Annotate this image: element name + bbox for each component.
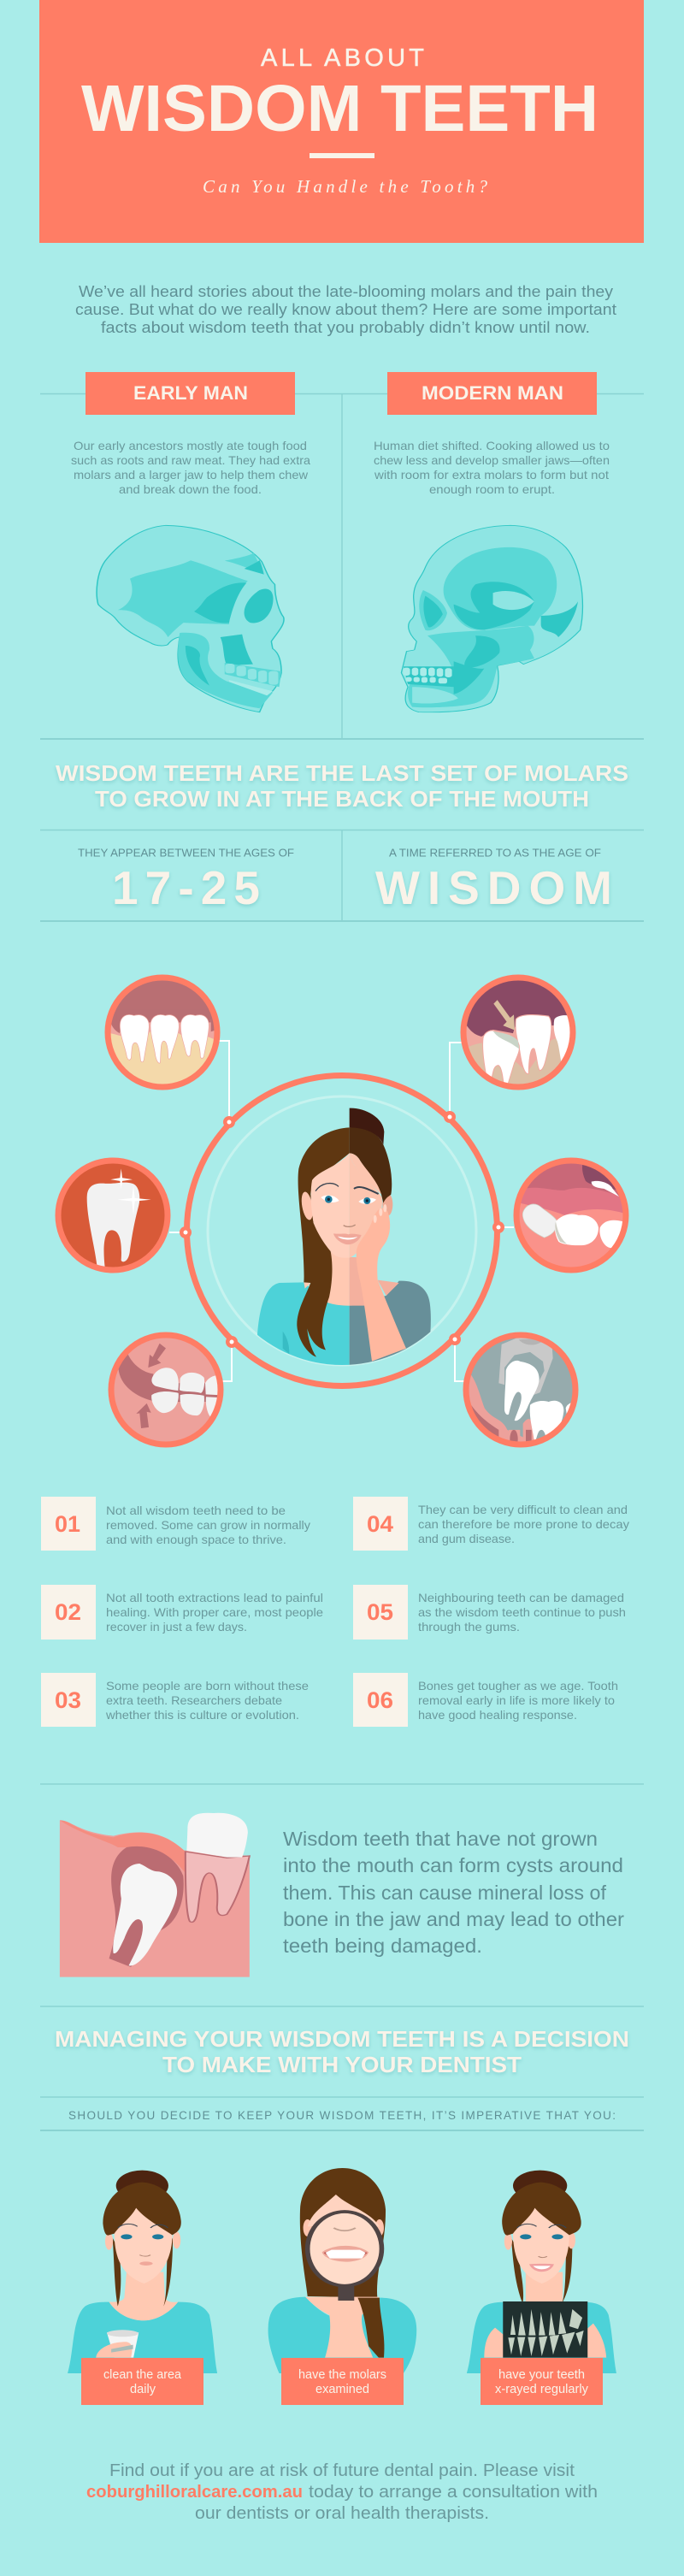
- modern man label: [387, 372, 597, 415]
- heading: managing your wisdom teeth: MANAGING YOUR WISDOM TEETH IS A DECISION: [55, 2026, 629, 2052]
- fact 05: through the gums.: [418, 1620, 520, 1634]
- cyst paragraph: teeth being damaged.: [283, 1935, 482, 1957]
- label: clean the area daily: daily: [130, 2382, 156, 2396]
- fact 03: whether this is culture or evolution.: [105, 1708, 299, 1722]
- fact 06: [353, 1673, 618, 1727]
- label: have the molars examined: have the molars: [298, 2367, 386, 2382]
- fact 04: and gum disease.: [418, 1532, 515, 1545]
- fact 02: healing. With proper care, most people: [106, 1605, 323, 1619]
- heading: wisdom teeth are the last molars: [56, 760, 628, 812]
- cyst paragraph: them. This can cause mineral loss of: [283, 1882, 607, 1904]
- modern man text: enough room to erupt.: [429, 482, 555, 496]
- label: have your teeth x-rayed regularly: x-rayed regularly: [495, 2382, 588, 2396]
- title: all about: ALL ABOUT: [261, 44, 424, 72]
- fact 05: as the wisdom teeth continue to push: [418, 1605, 626, 1619]
- label: have your teeth x-rayed regularly: [481, 2358, 603, 2405]
- fact 02: recover in just a few days.: [106, 1620, 247, 1634]
- illustration: woman with magnifying mirror: [268, 2168, 416, 2373]
- icon: early man skull: [97, 525, 284, 712]
- early man text: molars and a larger jaw to help them chew: [74, 468, 309, 482]
- label: clean the area daily: clean the area: [103, 2367, 182, 2382]
- fact 03: 03: [55, 1687, 81, 1713]
- icon: impacted tooth circle: [513, 1156, 630, 1274]
- cyst paragraph: into the mouth can form cysts around: [283, 1854, 623, 1876]
- fact 05: 05: [367, 1599, 393, 1625]
- illustration: woman with cup: [68, 2171, 217, 2373]
- fact 01: removed. Some can grow in normally: [106, 1518, 310, 1532]
- stat: wisdom: [375, 847, 612, 914]
- fact 02: 02: [55, 1599, 81, 1625]
- fact 05: Neighbouring teeth can be damaged: [418, 1591, 624, 1604]
- fact 02: Not all tooth extractions lead to painful: [106, 1591, 323, 1604]
- label: have your teeth x-rayed regularly: have your teeth: [498, 2367, 585, 2382]
- fact 04: 04: [367, 1511, 393, 1537]
- modern man text: [374, 439, 610, 496]
- stat: ages: [78, 847, 294, 914]
- fact 03: [41, 1673, 309, 1727]
- icon: modern man skull: [401, 525, 582, 712]
- panel: header banner: [39, 0, 644, 243]
- word: wisdom: WISDOM: [375, 861, 612, 914]
- modern man text: chew less and develop smaller jaws—often: [374, 453, 610, 467]
- icon: healthy teeth circle: [103, 972, 222, 1090]
- intro paragraph: We’ve all heard stories about the late-blooming molars and the pain they: [79, 282, 614, 300]
- icon: extraction circle: [462, 1332, 581, 1450]
- early man text: [71, 439, 310, 496]
- illustration: woman with toothache: [257, 1108, 431, 1385]
- intro paragraph: [75, 282, 616, 336]
- intro paragraph: facts about wisdom teeth that you probably didn’t know until now.: [101, 318, 590, 336]
- footer call to action: our dentists or oral health therapists.: [195, 2503, 489, 2523]
- fact 06: 06: [367, 1687, 393, 1713]
- subheading: keep your wisdom teeth: SHOULD YOU DECIDE TO KEEP YOUR WISDOM TEETH, IT’S IMPERATIVE THAT YOU:: [68, 2109, 616, 2122]
- footer call to action: [86, 2461, 598, 2523]
- fact 04: can therefore be more prone to decay: [418, 1517, 629, 1531]
- label: clean the area daily: [81, 2358, 203, 2405]
- fact 06: have good healing response.: [418, 1708, 577, 1722]
- fact 01: 01: [55, 1511, 80, 1537]
- fact 06: Bones get tougher as we age. Tooth: [418, 1679, 618, 1693]
- fact 06: removal early in life is more likely to: [418, 1693, 615, 1707]
- stat: wisdom: A TIME REFERRED TO AS THE AGE OF: [389, 847, 601, 859]
- cyst paragraph: [283, 1828, 624, 1957]
- heading: wisdom teeth are the last molars: TO GROW IN AT THE BACK OF THE MOUTH: [95, 786, 589, 812]
- illustration: woman with x-ray: [467, 2171, 616, 2373]
- heading: managing your wisdom teeth: [55, 2026, 629, 2077]
- fact 01: Not all wisdom teeth need to be: [106, 1504, 286, 1517]
- icon: shining tooth circle: [55, 1158, 171, 1273]
- early man text: such as roots and raw meat. They had extra: [71, 453, 310, 467]
- fact 03: extra teeth. Researchers debate: [106, 1693, 282, 1707]
- modern man text: with room for extra molars to form but not: [374, 468, 609, 482]
- footer call to action: today to arrange a consultation with: [309, 2482, 598, 2502]
- diagram: main circle: [180, 1076, 504, 1385]
- icon: crowding teeth circle: [105, 1330, 225, 1449]
- early man label: EARLY MAN: [133, 382, 248, 404]
- cyst paragraph: Wisdom teeth that have not grown: [283, 1828, 598, 1850]
- early man text: and break down the food.: [119, 482, 262, 496]
- title: wisdom teeth: WISDOM TEETH: [81, 72, 598, 145]
- label: have the molars examined: [281, 2358, 404, 2405]
- diagram: connectors: [169, 1041, 514, 1381]
- panel: modern man: [374, 372, 610, 712]
- early man text: Our early ancestors mostly ate tough food: [74, 439, 307, 452]
- early man label: [86, 372, 295, 415]
- cyst paragraph: bone in the jaw and may lead to other: [283, 1908, 624, 1930]
- subtitle: Can You Handle the Tooth?: [203, 176, 487, 197]
- fact 04: [353, 1497, 629, 1551]
- intro paragraph: cause. But what do we really know about them? Here are some important: [75, 300, 616, 318]
- label: have the molars examined: examined: [315, 2382, 369, 2396]
- fact 01: [41, 1497, 310, 1551]
- heading: wisdom teeth are the last molars: WISDOM TEETH ARE THE LAST SET OF MOLARS: [56, 760, 628, 786]
- fact 05: [353, 1585, 626, 1640]
- icon: decayed tooth circle: [459, 972, 579, 1090]
- number: 17-25: 17-25: [112, 861, 260, 914]
- modern man label: MODERN MAN: [422, 382, 563, 404]
- fact 03: Some people are born without these: [106, 1679, 309, 1693]
- footer call to action: Find out if you are at risk of future dental pain. Please visit: [109, 2461, 575, 2480]
- illustration: cyst around impacted wisdom tooth: [60, 1813, 250, 1977]
- modern man text: Human diet shifted. Cooking allowed us to: [374, 439, 610, 452]
- stat: ages: THEY APPEAR BETWEEN THE AGES OF: [78, 847, 294, 859]
- footer call to action: coburghilloralcare.com.au: [86, 2482, 303, 2502]
- fact 02: [41, 1585, 323, 1640]
- fact 01: and with enough space to thrive.: [106, 1533, 286, 1546]
- heading: managing your wisdom teeth: TO MAKE WITH YOUR DENTIST: [162, 2052, 522, 2077]
- fact 04: They can be very difficult to clean and: [418, 1503, 628, 1516]
- title divider: [310, 153, 374, 158]
- panel: early man: [71, 372, 310, 712]
